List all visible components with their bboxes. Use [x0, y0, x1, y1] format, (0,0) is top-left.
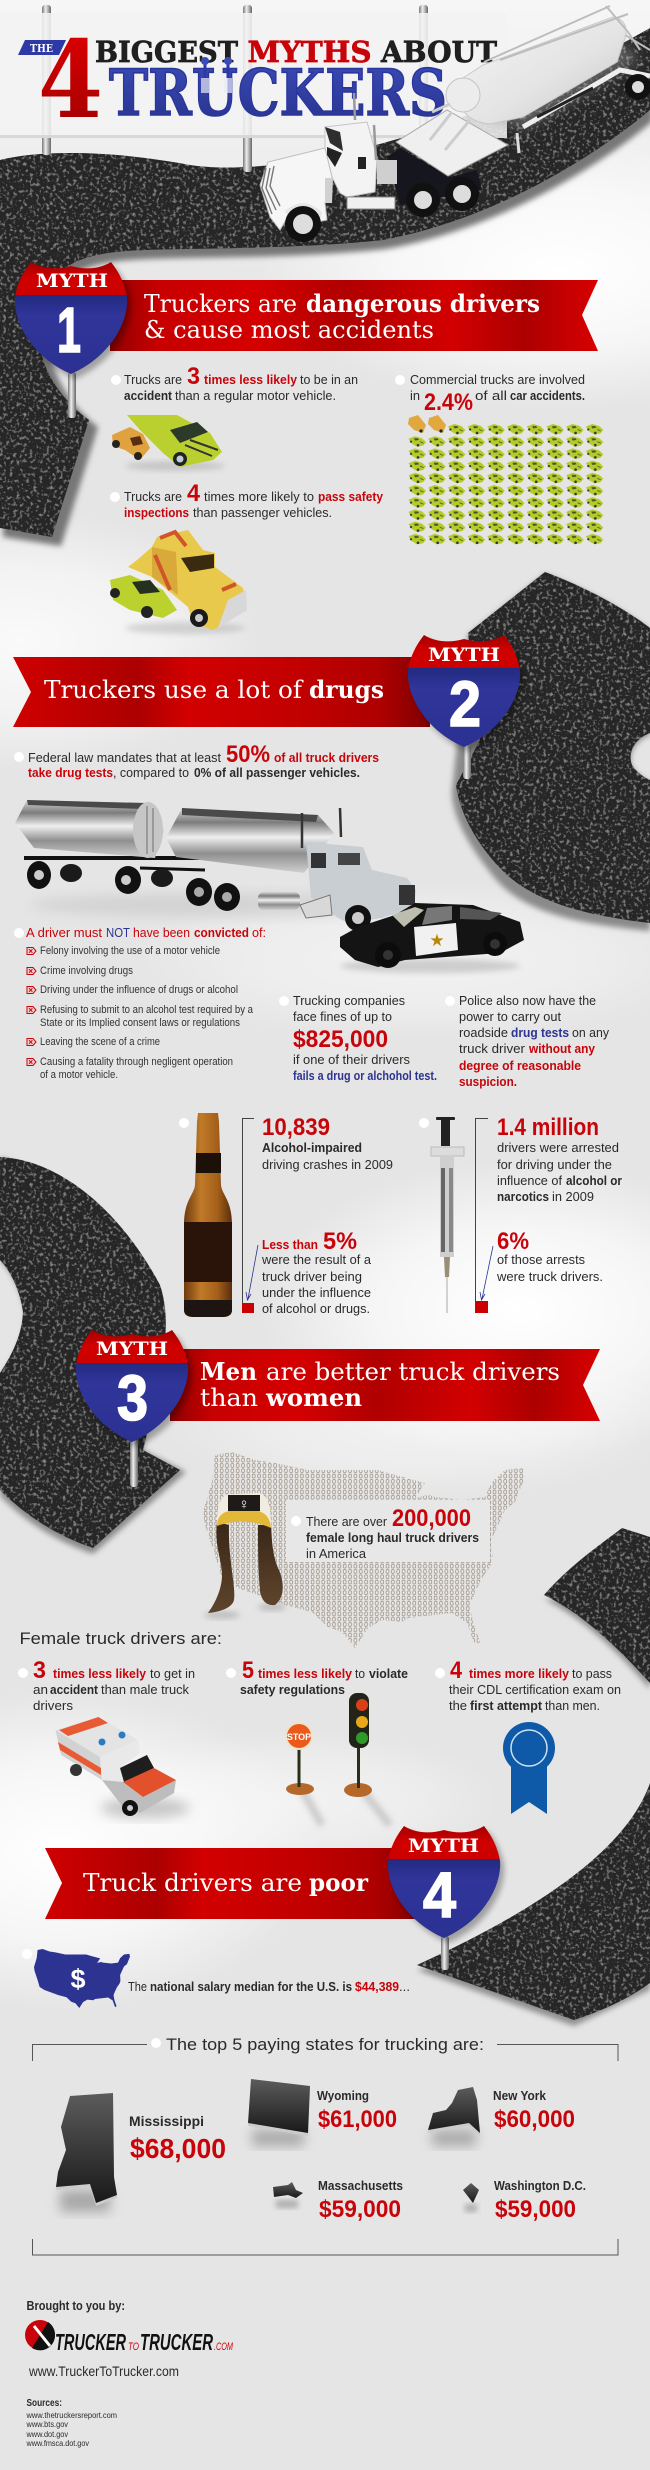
- state: Wyoming: Wyoming: [317, 2088, 369, 2103]
- title line one: [95, 35, 497, 69]
- text: 3 times less likely: than a regular motor vehicle.: [175, 389, 336, 403]
- list heading: NOT: [106, 925, 130, 940]
- text: 2.4 percent: of all: [475, 389, 507, 403]
- state: Mississippi: [56, 2093, 226, 2212]
- text: 3 times less likely: an: [33, 1683, 48, 1697]
- text: 2.4 percent: car accidents.: [510, 389, 585, 403]
- text: 3 times less likely: times less likely: [204, 373, 297, 387]
- text: 4 times more likely: their CDL certification exam on: [449, 1683, 621, 1697]
- text: 4 times more likely: 4: [187, 480, 201, 507]
- text: 200,000 female drivers: in America: [306, 1547, 366, 1561]
- billboard posts: [42, 5, 428, 172]
- platform: [517, 133, 519, 153]
- text: arrests: alcohol or: [566, 1174, 622, 1188]
- text: roadside tests: without any: [528, 1042, 595, 1056]
- text: sources: www.fmsca.dot.gov: [26, 2439, 89, 2448]
- text: 4 times more likely: inspections: [124, 506, 189, 520]
- text: 3 times less likely: Trucks are: [124, 373, 182, 387]
- tank: [463, 17, 626, 124]
- logo: TO: [128, 2341, 139, 2353]
- ribbon: myth 2: [13, 657, 430, 727]
- THE tag: THE: [30, 42, 53, 55]
- cap and hair: [204, 1493, 286, 1619]
- ambulance: [56, 1717, 190, 1818]
- text: national median: $44,389: [355, 1980, 399, 1994]
- state: Washington D.C.: $59,000: [495, 2196, 576, 2223]
- text: fines: if one of their drivers: [293, 1053, 410, 1067]
- ribbon: myth 1: [110, 280, 598, 351]
- tractor chassis: [387, 148, 482, 205]
- cab: [325, 122, 377, 197]
- text: federal law: , compared to: [113, 766, 189, 780]
- heading: myth 1: & cause most accidents: [144, 316, 434, 344]
- text: 200,000 female drivers: female long haul truck drivers: [306, 1531, 479, 1545]
- text: national median: national salary median for the U.S. is: [150, 1980, 352, 1994]
- text: 3 times less likely: than male truck: [101, 1683, 190, 1697]
- text: federal law: 50%: [226, 741, 270, 768]
- list: convictions: [14, 925, 266, 1081]
- heading: myth 1: [144, 289, 540, 344]
- text: alcohol crashes: Alcohol-impaired: [262, 1141, 362, 1155]
- list: convictions: of a motor vehicle.: [40, 1069, 118, 1081]
- wheels: [285, 206, 321, 242]
- list: convictions: Refusing to submit to an alcohol test required by a: [40, 1004, 254, 1016]
- road: lower left: [0, 1157, 186, 1554]
- shield: myth 1: MYTH: [36, 270, 108, 292]
- text: federal law: take drug tests: [28, 766, 113, 780]
- text: 3 times less likely: 3: [187, 363, 200, 390]
- list: convictions: Felony involving the use of a motor vehicle: [40, 945, 220, 957]
- text: 200,000 female drivers: 200,000: [392, 1505, 471, 1532]
- road: lower right: [417, 1783, 650, 2026]
- logo: TRUCKER: [140, 2329, 213, 2355]
- text: brought to you by: Brought to you by:: [26, 2298, 125, 2313]
- heading: myth 1: dangerous drivers: [306, 289, 540, 318]
- text: national median: ...: [399, 1980, 410, 1994]
- state: New York: [428, 2087, 575, 2146]
- list: convictions: State or its Implied consent laws or regulations: [40, 1017, 240, 1029]
- stat: alcohol crashes bar: [242, 1118, 258, 1313]
- text: 4 times more likely: the: [449, 1699, 467, 1713]
- text: website: www.TruckerToTrucker.com: [28, 2363, 179, 2379]
- shield: myth 3: MYTH: [96, 1338, 168, 1360]
- state: Mississippi: Mississippi: [129, 2113, 204, 2129]
- text: 3 times less likely: to be in an: [300, 373, 358, 387]
- text: 5 times less likely: safety regulations: [240, 1683, 345, 1697]
- cap and hair: ♀: [238, 1496, 250, 1513]
- text: fines: Trucking companies: [293, 994, 405, 1008]
- state: Wyoming: $61,000: [318, 2106, 397, 2133]
- icon: mini trucks: [408, 415, 446, 433]
- police car: [340, 903, 524, 973]
- text: fines: face fines of up to: [293, 1010, 392, 1024]
- text: alcohol crashes: driving crashes in 2009: [262, 1158, 393, 1172]
- text: 3 times less likely: to get in: [150, 1667, 195, 1681]
- heading: myth 3: are better truck drivers: [266, 1358, 560, 1386]
- text: alcohol crashes: of alcohol or drugs.: [262, 1302, 370, 1316]
- text: 5 times less likely: times less likely: [258, 1667, 352, 1681]
- text: 2.4 percent: [395, 373, 585, 416]
- state: Washington D.C.: [463, 2178, 586, 2223]
- text: fines: fails a drug or alchohol test.: [293, 1069, 437, 1083]
- text: 5 times less likely: violate: [369, 1667, 408, 1681]
- icon: blue US map with dollar: [22, 1949, 130, 2008]
- road: middle right: [452, 572, 650, 931]
- text: 4 times more likely: times more likely: [469, 1667, 569, 1681]
- text: arrests: narcotics: [497, 1190, 549, 1204]
- text: sources: www.bts.gov: [26, 2420, 68, 2429]
- list: convictions: Crime involving drugs: [40, 965, 133, 977]
- text: 4 times more likely: 4: [450, 1657, 463, 1684]
- bottle: [179, 1113, 232, 1317]
- police car: ★: [429, 931, 445, 950]
- text: federal law: [14, 741, 379, 780]
- text: 5 times less likely: to: [355, 1667, 365, 1681]
- text: arrests: drivers were arrested: [497, 1141, 619, 1155]
- text: alcohol crashes: under the influence: [262, 1286, 371, 1300]
- text: alcohol crashes: Less than: [262, 1238, 318, 1252]
- heading: myth 3: women: [265, 1383, 362, 1412]
- text: 5 times less likely: [226, 1657, 408, 1697]
- logo: [25, 2320, 234, 2355]
- text: roadside tests: drug tests: [511, 1026, 569, 1040]
- text: 2.4 percent: Commercial trucks are involved: [410, 373, 585, 387]
- panel frame: [32, 2044, 618, 2255]
- trailer wheel and frame: [523, 70, 650, 127]
- text: arrests: influence of: [497, 1174, 563, 1188]
- logo: .COM: [214, 2341, 234, 2353]
- text: 3 times less likely: [111, 363, 358, 403]
- text: federal law: of all truck drivers: [274, 751, 379, 765]
- toy car and small truck: [112, 415, 225, 471]
- title line two: TRUCKERS: [109, 56, 447, 131]
- dotted map of the US: [203, 1452, 525, 1648]
- text: 2.4 percent: 2.4%: [424, 389, 473, 416]
- text: 4 times more likely: than passenger vehicles.: [193, 506, 332, 520]
- road: right side fragment: [544, 1528, 650, 1689]
- title line one: MYTHS: [248, 35, 372, 69]
- text: roadside tests: roadside: [459, 1026, 508, 1040]
- text: 4 times more likely: first attempt: [470, 1699, 543, 1713]
- heading: myth 3: than: [200, 1384, 258, 1412]
- text: 3 times less likely: [18, 1657, 195, 1713]
- state: Washington D.C.: Washington D.C.: [494, 2178, 586, 2193]
- text: 3 times less likely: accident: [124, 389, 173, 403]
- text: 4 times more likely: times more likely to: [204, 490, 314, 504]
- stop sign and traffic light: [285, 1693, 390, 1825]
- icon: blue US map with dollar: $: [70, 1964, 86, 1994]
- stop sign and traffic light: STOP: [287, 1732, 311, 1742]
- heading: female truck drivers are: Female truck drivers are:: [20, 1629, 222, 1648]
- text: arrests: for driving under the: [497, 1158, 612, 1172]
- text: arrests: 1.4 million: [497, 1114, 599, 1141]
- text: 3 times less likely: accident: [50, 1683, 99, 1697]
- billboard panel: [0, 13, 507, 138]
- shield: myth 3: [74, 1328, 192, 1487]
- pin decorations in the word: [201, 57, 232, 93]
- text: 200,000 female drivers: There are over: [306, 1515, 387, 1529]
- shield: myth 4: MYTH: [408, 1835, 479, 1857]
- shield: myth 4: [386, 1824, 504, 1970]
- state: Massachusetts: $59,000: [319, 2196, 401, 2223]
- shield: myth 1: 1: [57, 294, 81, 366]
- road: top sweep and left descent: [0, 28, 650, 546]
- shield: myth 4: 4: [423, 1859, 456, 1931]
- text: roadside tests: truck driver: [459, 1042, 525, 1056]
- state: Massachusetts: Massachusetts: [318, 2178, 403, 2193]
- text: sources: www.thetruckersreport.com: [26, 2411, 117, 2420]
- white tanker truck: [260, 6, 650, 242]
- text: 4 times more likely: than men.: [545, 1699, 600, 1713]
- text: sources: [26, 2398, 117, 2448]
- text: 4 times more likely: to pass: [572, 1667, 612, 1681]
- state: Mississippi: $68,000: [130, 2133, 226, 2164]
- list: convictions: Causing a fatality through negligent operation: [40, 1056, 233, 1068]
- panel heading: The top 5 paying states for trucking are:: [166, 2035, 484, 2054]
- text: alcohol crashes: 5%: [323, 1228, 357, 1255]
- text: roadside tests: on any: [572, 1026, 610, 1040]
- text: sources: Sources:: [26, 2398, 62, 2409]
- syringe: [419, 1117, 464, 1313]
- list heading: of:: [252, 925, 266, 940]
- shield: myth 2: MYTH: [428, 644, 500, 666]
- text: alcohol crashes: were the result of a: [261, 1253, 371, 1267]
- list items: [27, 948, 36, 954]
- text: alcohol crashes: truck driver being: [262, 1270, 362, 1284]
- shield: myth 2: 2: [449, 668, 481, 740]
- heading: myth 3: [200, 1357, 560, 1412]
- state: Wyoming: [248, 2079, 397, 2146]
- ribbon: myth 4: [45, 1848, 420, 1919]
- text: 4 times more likely: [110, 480, 383, 520]
- text: arrests: were truck drivers.: [496, 1270, 603, 1284]
- text: roadside tests: power to carry out: [459, 1010, 562, 1024]
- shield: myth 3: 3: [117, 1362, 148, 1434]
- state: New York: New York: [493, 2088, 547, 2103]
- heading: myth 2: Truckers use a lot of: [44, 676, 304, 704]
- title: [18, 18, 497, 143]
- text: arrests: in 2009: [552, 1190, 594, 1204]
- panel: top paying states: [32, 2035, 618, 2255]
- heading: myth 4: poor: [309, 1868, 368, 1897]
- text: roadside tests: [445, 994, 610, 1089]
- shield: myth 1: [13, 260, 131, 418]
- text: arrests: of those arrests: [497, 1253, 585, 1267]
- ribbon: myth 3: [170, 1349, 600, 1421]
- tank shadow: [470, 40, 640, 130]
- big number four: 4: [38, 18, 103, 143]
- list heading: convicted: [194, 925, 249, 940]
- heading: myth 4: Truck drivers are: [83, 1869, 302, 1897]
- state: Massachusetts: [273, 2178, 403, 2223]
- text: 4 times more likely: Trucks are: [124, 490, 182, 504]
- text: 3 times less likely: 3: [33, 1657, 46, 1684]
- text: fines: $825,000: [293, 1026, 388, 1053]
- shield: myth 2: [406, 633, 524, 779]
- yellow toy truck and car: [110, 530, 247, 634]
- text: 4 times more likely: pass safety: [318, 490, 383, 504]
- text: roadside tests: degree of reasonable: [459, 1059, 581, 1073]
- text: 2.4 percent: in: [410, 389, 420, 403]
- text: 3 times less likely: drivers: [33, 1699, 73, 1713]
- text: 4 times more likely: [435, 1657, 621, 1713]
- text: federal law: 0% of all passenger vehicles.: [194, 766, 360, 780]
- text: alcohol crashes: [261, 1114, 393, 1316]
- heading: myth 3: Men: [200, 1357, 257, 1386]
- text: federal law: Federal law mandates that at least: [28, 751, 222, 765]
- text: sources: www.dot.gov: [26, 2430, 68, 2439]
- heading: myth 1: Truckers are: [144, 290, 297, 318]
- grid of 98 cars and 2 trucks: [407, 415, 604, 545]
- text: 5 times less likely: 5: [242, 1657, 254, 1684]
- THE tag: [18, 40, 66, 55]
- list heading: [14, 925, 266, 940]
- title line one: BIGGEST: [95, 35, 238, 69]
- title line one: ABOUT: [380, 35, 497, 69]
- state: New York: $60,000: [494, 2106, 575, 2133]
- list heading: A driver must: [26, 925, 102, 940]
- list heading: have been: [133, 925, 190, 940]
- text: national median: The: [128, 1980, 147, 1994]
- stat: arrests bar: [476, 1118, 493, 1313]
- logo: TRUCKER: [55, 2329, 126, 2355]
- text: roadside tests: suspicion.: [459, 1075, 517, 1089]
- list: convictions: Leaving the scene of a crime: [40, 1036, 160, 1048]
- heading: myth 2: drugs: [309, 675, 384, 704]
- text: alcohol crashes: 10,839: [262, 1114, 330, 1141]
- text: arrests: [496, 1114, 622, 1284]
- list: convictions: Driving under the influence of drugs or alcohol: [40, 984, 238, 996]
- text: 200,000 female drivers: [291, 1505, 479, 1561]
- icon: blue award ribbon: [503, 1722, 555, 1814]
- text: 3 times less likely: times less likely: [53, 1667, 146, 1681]
- silver tanker truck: [15, 800, 416, 931]
- text: arrests: 6%: [497, 1228, 529, 1255]
- text: fines: [279, 994, 437, 1083]
- text: roadside tests: Police also now have the: [459, 994, 596, 1008]
